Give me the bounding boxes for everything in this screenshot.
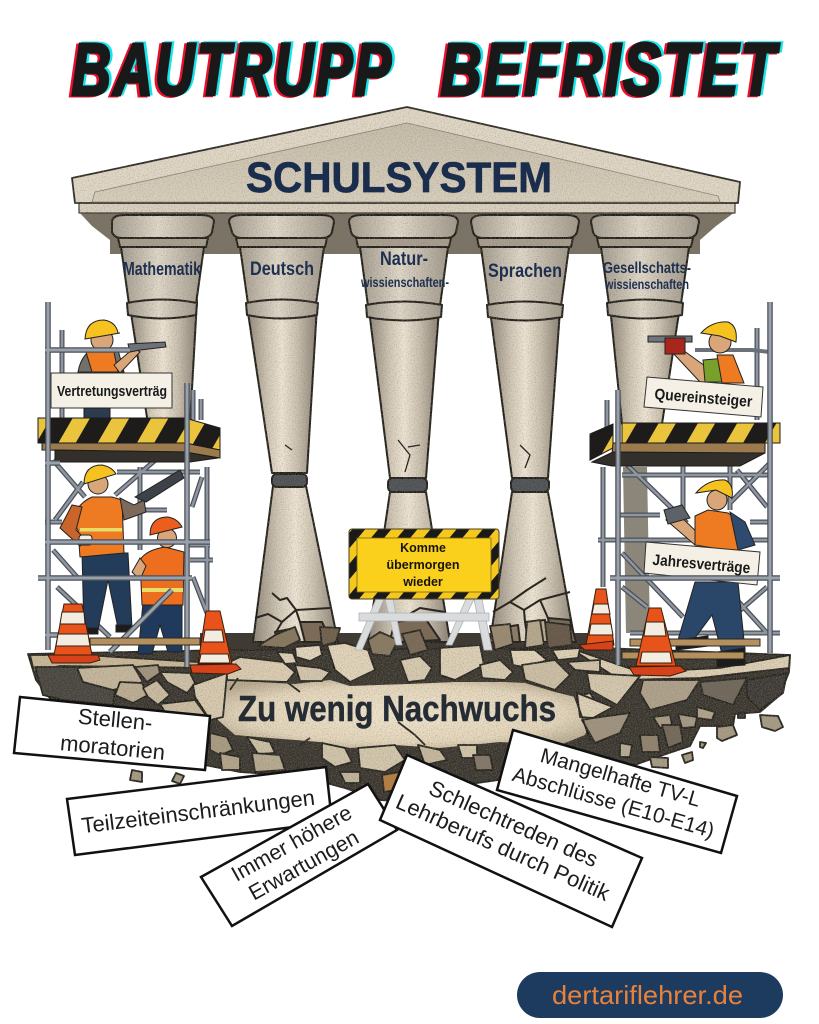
column 1: Mathematik	[112, 215, 214, 424]
barricade sign	[349, 529, 499, 650]
poles left, front layer	[38, 302, 210, 667]
label: Stellenmoratorien: Stellen-	[77, 704, 154, 736]
column 4: Sprachen	[471, 215, 579, 642]
title: BAUTRUPP	[74, 27, 396, 110]
sign stand	[355, 599, 492, 650]
label: Sprachen: Sprachen	[488, 261, 562, 282]
label: Gesellschaftswissenschaften	[603, 260, 691, 292]
label: Mangelhafte TV-L Abschlüsse	[497, 730, 737, 853]
footer badge: dertariflehrer.de	[517, 972, 783, 1018]
title	[69, 27, 782, 112]
label: Mangelhafte TV-L Abschlüsse: Mangelhafte TV-L	[538, 744, 703, 812]
heading: SCHULSYSTEM: SCHULSYSTEM	[246, 154, 552, 202]
label: Immer höhere Erwartungen	[201, 784, 397, 926]
entablature underside	[79, 212, 735, 254]
traffic cone right 2	[629, 608, 686, 676]
column 3: Naturwissenschaften	[349, 215, 458, 642]
ground back strip	[200, 633, 600, 657]
rock mass	[28, 648, 790, 802]
title: BEFRISTET	[440, 28, 780, 111]
cracks over slab	[230, 678, 590, 745]
label: Mangelhafte TV-L Abschlüsse: Abschlüsse (E10-E14)	[510, 763, 717, 843]
title: BAUTRUPP	[69, 29, 391, 112]
worker with blue trousers	[60, 465, 184, 634]
pediment	[72, 107, 740, 203]
temple: school system	[72, 107, 740, 642]
rock label: Zu wenig Nachwuchs: Zu wenig Nachwuchs	[238, 688, 556, 729]
traffic cone left 2	[190, 611, 241, 674]
hazard frame	[349, 529, 499, 599]
poles right, back layer	[598, 328, 780, 633]
lower right worker	[664, 480, 755, 667]
label: Gesellschaftswissenschaften: wissienschaften	[604, 276, 689, 292]
title: BEFRISTET	[443, 27, 782, 110]
scaffold left	[38, 302, 241, 674]
worker with orange helmet	[132, 517, 184, 654]
traffic cone right 1	[579, 589, 614, 650]
title: BAUTRUPP	[72, 28, 393, 111]
sign text: wieder	[402, 575, 443, 589]
sign text: übermorgen	[387, 558, 459, 572]
upper right worker	[648, 322, 770, 383]
sign: Jahresverträge: Jahresverträge	[652, 552, 751, 577]
cornice band	[79, 202, 735, 213]
sign: Quereinsteiger	[644, 377, 763, 417]
label: Schlechtreden des Lehrberufs durch Politik	[380, 755, 642, 927]
yellow panel	[357, 538, 491, 592]
label: Deutsch: Deutsch	[250, 259, 314, 280]
label: Immer höhere Erwartungen: Immer höhere	[227, 800, 356, 886]
sign: Quereinsteiger: Quereinsteiger	[654, 386, 753, 411]
label: Schlechtreden des Lehrberufs durch Politik: Lehrberufs durch Politik	[392, 789, 614, 906]
tympanum	[92, 123, 720, 202]
ground: cracked rock slab	[28, 620, 790, 802]
column 2: Deutsch	[229, 215, 338, 642]
platform right	[590, 423, 780, 466]
footer badge: dertariflehrer.de: dertariflehrer.de	[552, 980, 743, 1010]
sign: Jahresverträge	[644, 542, 760, 585]
scaffold right	[579, 302, 780, 676]
title: BEFRISTET	[438, 29, 777, 112]
temple stonework	[72, 107, 740, 642]
sign text	[387, 541, 459, 589]
label: Teilzeiteinschränkungen	[67, 767, 332, 855]
platform planks right	[622, 639, 760, 659]
central light patch	[214, 680, 592, 748]
platform left	[38, 408, 220, 462]
label: Naturwissenschaften: wissienschaften-	[360, 274, 449, 290]
sign text: Komme	[400, 541, 446, 555]
sign: Vertretungsverträg: Vertretungsverträg	[57, 383, 167, 400]
sign: Vertretungsverträg	[51, 373, 172, 408]
label: Naturwissenschaften	[360, 249, 449, 290]
column base rubble and cracks	[255, 440, 576, 642]
platform planks left	[90, 638, 200, 645]
label: Mathematik: Mathematik	[123, 259, 202, 279]
label: Stellenmoratorien	[14, 697, 210, 770]
label: Gesellschaftswissenschaften: Gesellschatts-	[603, 260, 691, 277]
label: Schlechtreden des Lehrberufs durch Politik: Schlechtreden des	[425, 775, 602, 872]
poles right, front layer	[610, 302, 780, 665]
traffic cone left 1	[48, 604, 100, 663]
poles left, back layer	[45, 330, 213, 637]
label: Naturwissenschaften: Natur-	[380, 249, 428, 270]
falling rock fragments	[130, 713, 783, 784]
label: Immer höhere Erwartungen: Erwartungen	[245, 825, 363, 905]
label: Teilzeiteinschränkungen: Teilzeiteinschränkungen	[80, 785, 316, 838]
rubble stones	[30, 620, 790, 792]
label: Stellenmoratorien: moratorien	[59, 730, 166, 765]
column 5: Gesellschaftswissenschaften	[591, 215, 699, 633]
upper worker	[78, 320, 166, 373]
